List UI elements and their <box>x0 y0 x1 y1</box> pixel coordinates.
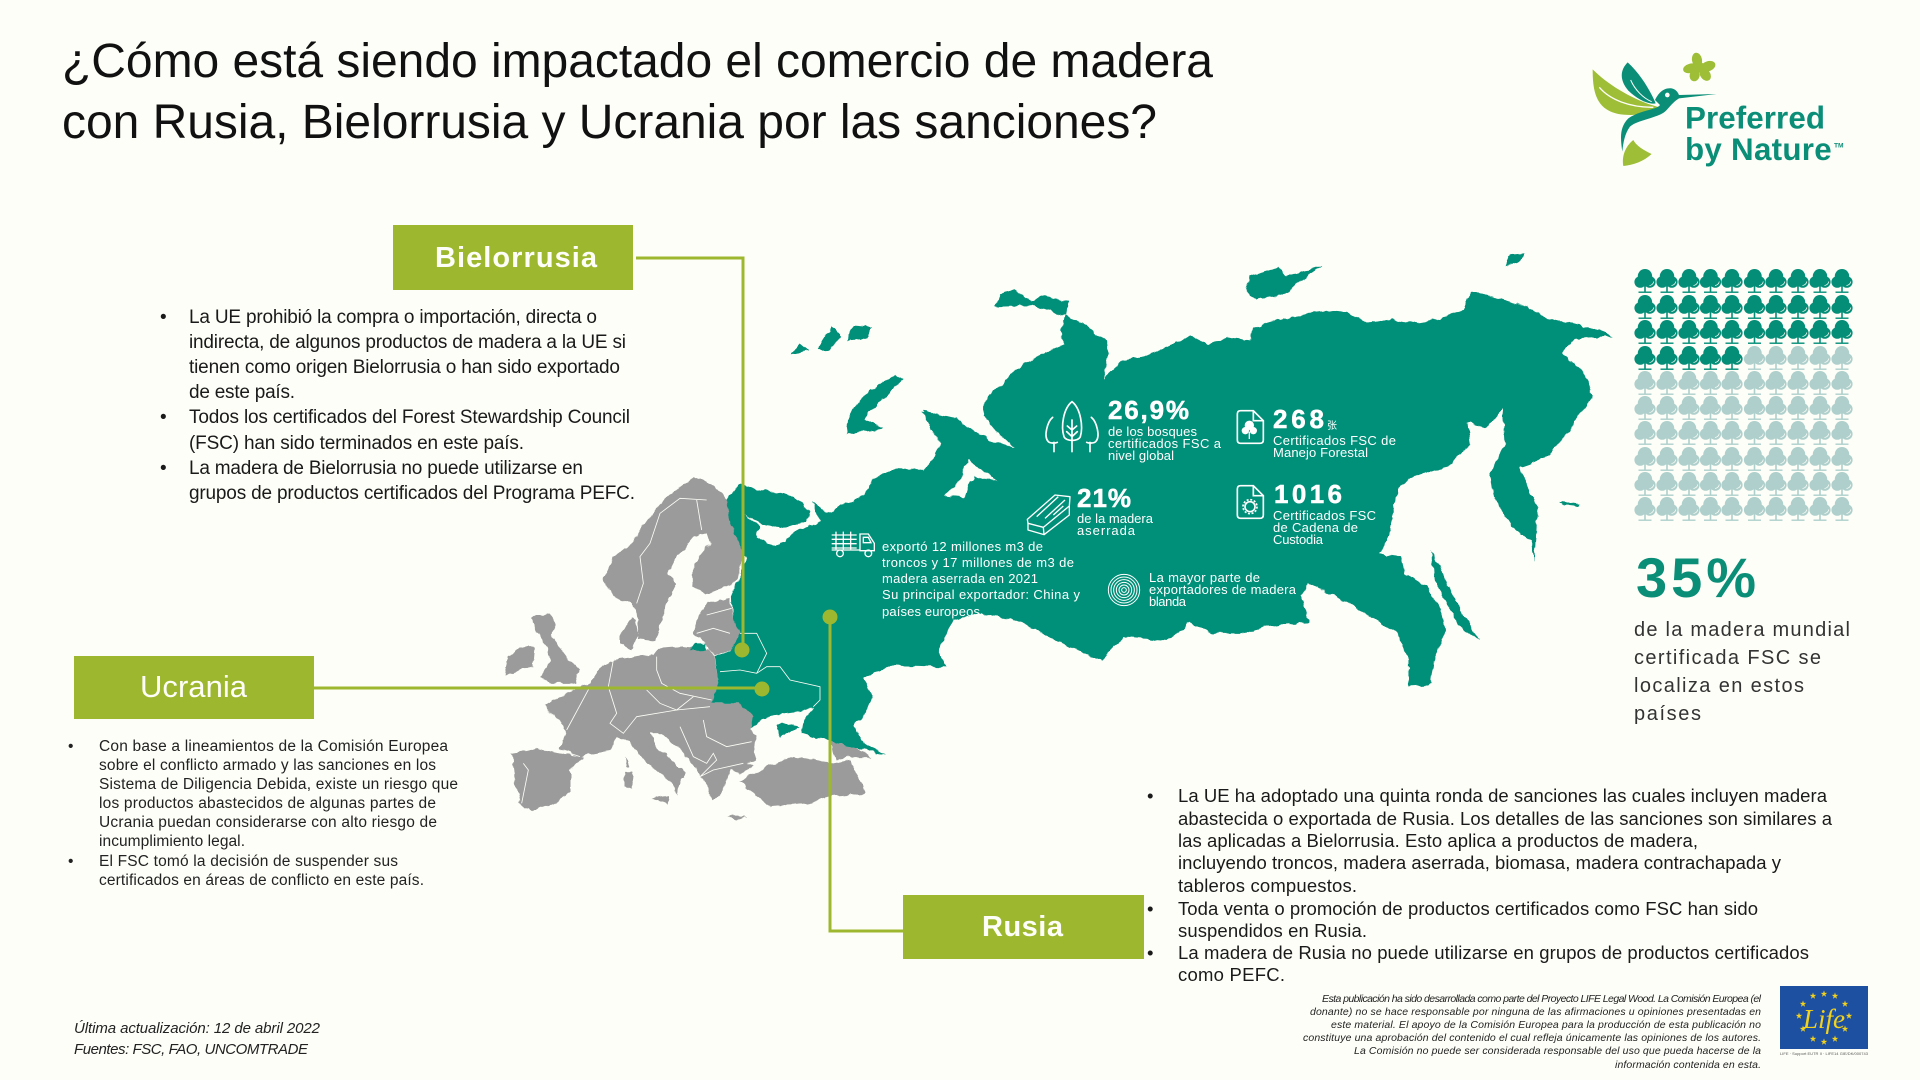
text: Ucrania bullets: certificados en áreas de conflicto en este país. <box>99 872 424 889</box>
text: Ucrania bullets: sobre el conflicto armado y las sanciones en los <box>99 757 436 774</box>
panel: Rusia <box>903 785 1833 985</box>
stat: exports: exportó 12 millones m3 de <box>882 539 1043 554</box>
text: Rusia bullets: suspendidos en Rusia. <box>1178 920 1367 941</box>
stat: 26,9% forests: nivel global <box>1108 448 1174 463</box>
text: Bielorrusia bullets: Todos los certificados del Forest Stewardship Council <box>189 407 630 428</box>
stat: exports: madera aserrada en 2021 <box>882 571 1038 586</box>
text: Rusia bullets: las aplicadas a Bielorrusia. Esto aplica a productos de madera, <box>1178 830 1698 851</box>
text: Bielorrusia bullets: tienen como origen Bielorrusia o han sido exportado <box>189 357 620 378</box>
heading: Ucrania: Ucrania <box>140 669 248 704</box>
text: Bielorrusia bullets: (FSC) han sido terminados en este país. <box>189 433 524 454</box>
stat: 1016 chain of custody certificates <box>1237 479 1376 547</box>
callout: 35%: países <box>1634 703 1701 725</box>
stat: 26,9% forests: certificados FSC a <box>1108 436 1222 451</box>
logo: Preferred by Nature: TM <box>1834 143 1844 150</box>
text: update date and sources: Fuentes: FSC, FAO, UNCOMTRADE <box>74 1041 309 1058</box>
icon: document with gear <box>1237 486 1263 518</box>
map: Russia, Belarus and Ukraine teal <box>690 253 1613 755</box>
map: Belarus and Ukraine borders <box>720 633 820 707</box>
text: Ucrania bullets: • <box>68 853 73 870</box>
text: update date and sources <box>74 1020 321 1058</box>
icon: log rings <box>1108 574 1140 606</box>
text: Rusia bullets: incluyendo troncos, madera aserrada, biomasa, madera contrachapada y <box>1178 852 1782 873</box>
stat: 268 forest management certificates: Certificados FSC de <box>1273 433 1396 448</box>
text: Bielorrusia bullets: • <box>160 307 167 328</box>
stat: exports: Su principal exportador: China y <box>882 587 1080 602</box>
panel: Bielorrusia <box>160 225 635 504</box>
stat: 1016 chain of custody certificates: de Cadena de <box>1273 520 1358 535</box>
stat: 1016 chain of custody certificates: Certificados FSC <box>1273 508 1376 523</box>
stat: 26,9% forests <box>1046 395 1222 463</box>
logo: EU LIFE <box>1780 986 1869 1056</box>
logo: EU LIFE: ★ <box>1810 1035 1816 1043</box>
text: Ucrania bullets: Ucrania puedan considerarse con alto riesgo de <box>99 814 437 831</box>
text: Bielorrusia bullets: La madera de Bielorrusia no puede utilizarse en <box>189 458 583 479</box>
map: Europe and Russia <box>505 253 1613 820</box>
stat: softwood exporters <box>1108 570 1297 609</box>
map: Crimea and Kaliningrad <box>690 643 800 737</box>
logo: EU LIFE: Life <box>1802 1004 1845 1034</box>
text: Bielorrusia bullets: grupos de productos certificados del Programa PEFC. <box>189 483 635 504</box>
title: ¿Cómo está siendo impactado el comercio de madera <box>62 35 1213 88</box>
stat: 1016 chain of custody certificates: 1016 <box>1274 479 1342 509</box>
logo: EU LIFE: ★ <box>1842 1025 1848 1033</box>
stat: 21% sawn wood: 21% <box>1077 483 1131 513</box>
chart: pictogram of 100 trees, 35 dark <box>1634 269 1853 521</box>
icon: document with tree <box>1237 411 1263 443</box>
text: disclaimer <box>1303 993 1762 1071</box>
map: Europe country borders <box>522 498 752 803</box>
text: Rusia bullets: abastecida o exportada de Rusia. Los detalles de las sanciones son similares a <box>1178 808 1833 829</box>
text: Rusia bullets: • <box>1147 785 1153 806</box>
text: disclaimer: este material. El apoyo de la Comisión Europea para la producción de esta publicación no <box>1331 1019 1761 1031</box>
title: con Rusia, Bielorrusia y Ucrania por las sanciones? <box>62 96 1157 149</box>
logo: EU LIFE: ★ <box>1820 1038 1828 1046</box>
stat: 21% sawn wood: aserrada <box>1077 523 1136 538</box>
logo: EU LIFE: LIFE · Support EUTR II · LIFE14 GIE/DK/000743 <box>1780 1051 1869 1056</box>
icon: timber truck <box>832 532 874 557</box>
stat: exports: países europeos <box>882 604 980 619</box>
text: disclaimer: La Comisión no puede ser considerada responsable del uso que pueda hacerse de la <box>1354 1045 1761 1057</box>
text: Rusia bullets: tableros compuestos. <box>1178 875 1357 896</box>
heading: Bielorrusia <box>393 225 633 290</box>
logo: EU LIFE: ★ <box>1800 1025 1806 1033</box>
text: Ucrania bullets: los productos abastecidos de algunas partes de <box>99 795 436 812</box>
heading: Ucrania <box>74 656 314 719</box>
logo: EU LIFE: ★ <box>1800 1000 1806 1008</box>
stat: 268 forest management certificates: 268 <box>1273 404 1324 434</box>
callout: 35%: certificada FSC se <box>1634 647 1821 669</box>
logo: Preferred by Nature: by Nature <box>1685 132 1832 167</box>
text: Bielorrusia bullets: La UE prohibió la compra o importación, directa o <box>189 307 597 328</box>
text: Rusia bullets: • <box>1147 898 1153 919</box>
text: Ucrania bullets: incumplimiento legal. <box>99 833 245 850</box>
icon: three trees <box>1046 402 1098 452</box>
stat: 26,9% forests: de los bosques <box>1108 424 1198 439</box>
logo: EU LIFE: ★ <box>1820 990 1828 998</box>
logo: EU LIFE: ★ <box>1842 1000 1848 1008</box>
callout: 35%: 35% <box>1636 546 1756 609</box>
logo: Preferred by Nature: Preferred <box>1685 100 1825 135</box>
text: Ucrania bullets: • <box>68 738 73 755</box>
text: Bielorrusia bullets: • <box>160 458 167 479</box>
stat: 268 forest management certificates: Manejo Forestal <box>1273 445 1368 460</box>
text: Ucrania bullets: El FSC tomó la decisión de suspender sus <box>99 853 398 870</box>
stat: 268 forest management certificates: 张 <box>1327 420 1337 432</box>
text: Bielorrusia bullets <box>160 307 635 504</box>
logo: EU LIFE: ★ <box>1832 1035 1838 1043</box>
map: Europe grey countries <box>505 477 872 820</box>
text: Rusia bullets: como PEFC. <box>1178 964 1285 985</box>
stat: 1016 chain of custody certificates: Custodia <box>1273 532 1324 547</box>
callout: 35%: de la madera mundial <box>1634 619 1850 641</box>
heading: Rusia: Rusia <box>982 911 1064 943</box>
text: Rusia bullets: La UE ha adoptado una quinta ronda de sanciones las cuales incluyen madera <box>1178 785 1828 806</box>
text: Rusia bullets: La madera de Rusia no puede utilizarse en grupos de productos certificados <box>1178 942 1809 963</box>
stat: exports <box>832 532 1080 619</box>
text: Ucrania bullets <box>68 738 458 889</box>
heading: Rusia <box>903 895 1144 959</box>
text: disclaimer: información contenida en esta. <box>1615 1059 1761 1071</box>
text: Bielorrusia bullets: • <box>160 407 167 428</box>
logo: EU LIFE: ★ <box>1796 1012 1802 1020</box>
text: Rusia bullets <box>1147 785 1833 985</box>
stat: softwood exporters: La mayor parte de <box>1149 570 1260 585</box>
text: Ucrania bullets: Con base a lineamientos de la Comisión Europea <box>99 738 448 755</box>
heading: Bielorrusia: Bielorrusia <box>435 242 598 274</box>
text: disclaimer: Esta publicación ha sido desarrollada como parte del Proyecto LIFE Legal Wood. La Comisión Europea (el <box>1322 993 1762 1005</box>
connector: Bielorrusia <box>636 258 750 658</box>
text: update date and sources: Última actualización: 12 de abril 2022 <box>74 1020 321 1037</box>
logo: EU LIFE: ★ <box>1810 992 1816 1000</box>
text: Ucrania bullets: Sistema de Diligencia Debida, existe un riesgo que <box>99 776 458 793</box>
icon: planks <box>1027 495 1070 535</box>
logo: Preferred by Nature <box>1593 52 1844 167</box>
callout: 35% <box>1634 546 1850 725</box>
text: Bielorrusia bullets: de este país. <box>189 382 295 403</box>
stat: 21% sawn wood: de la madera <box>1077 511 1154 526</box>
title <box>62 35 1213 149</box>
panel: Ucrania <box>68 656 458 889</box>
text: disclaimer: constituye una aprobación del contenido el cual refleja únicamente las opiniones de los autores. <box>1303 1032 1761 1044</box>
text: Rusia bullets: Toda venta o promoción de productos certificados como FSC han sido <box>1178 898 1758 919</box>
logo: EU LIFE: ★ <box>1846 1012 1852 1020</box>
connector: Ucrania <box>314 682 770 696</box>
callout: 35%: localiza en estos <box>1634 675 1804 697</box>
text: disclaimer: donante) no se hace responsable por ninguna de las afirmaciones u opiniones presentadas en <box>1310 1006 1761 1018</box>
stat: softwood exporters: blanda <box>1149 594 1187 609</box>
stat: 26,9% forests: 26,9% <box>1108 395 1189 425</box>
stat: exports: troncos y 17 millones de m3 de <box>882 555 1074 570</box>
stat: softwood exporters: exportadores de madera <box>1149 582 1297 597</box>
logo: EU LIFE: ★ <box>1832 992 1838 1000</box>
connector: Rusia <box>822 610 903 931</box>
stat: 21% sawn wood <box>1027 483 1154 538</box>
text: Bielorrusia bullets: indirecta, de algunos productos de madera a la UE si <box>189 332 626 353</box>
text: Rusia bullets: • <box>1147 942 1153 963</box>
stat: 268 forest management certificates <box>1237 404 1396 460</box>
